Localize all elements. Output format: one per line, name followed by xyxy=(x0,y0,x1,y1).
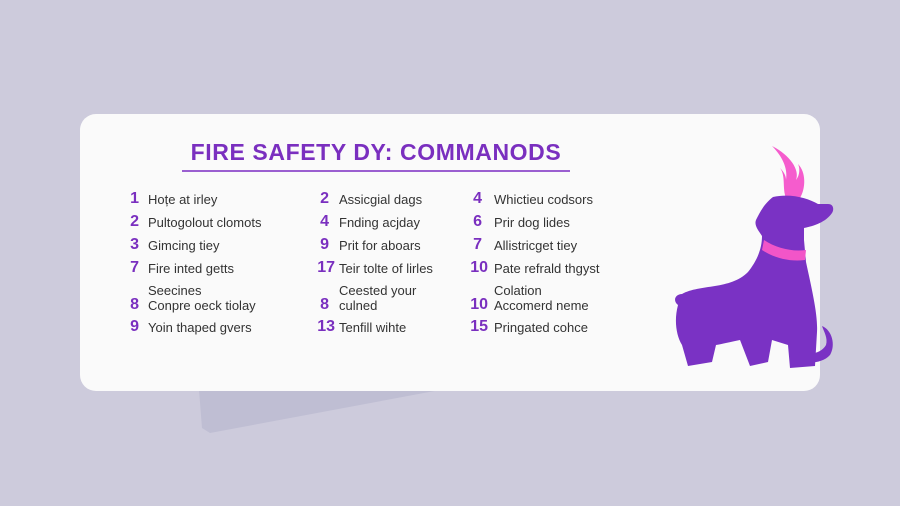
list: commands: Tenfill wihte xyxy=(339,320,406,335)
list: commands: Assicgial dags xyxy=(339,192,422,207)
list: commands: 4 xyxy=(320,213,329,230)
list: commands: 8 xyxy=(320,296,329,313)
flame xyxy=(772,146,804,198)
list: commands: Fire inted getts xyxy=(148,261,234,276)
list: commands: 10 xyxy=(470,259,488,276)
list: commands xyxy=(130,190,600,335)
icon: dog with flame xyxy=(675,146,834,368)
list: commands: Ceested your xyxy=(339,283,416,298)
list: commands: 9 xyxy=(320,236,329,253)
list: commands: 4 xyxy=(473,190,482,207)
list: commands: Colation xyxy=(494,283,542,298)
list: commands: 1 xyxy=(130,190,139,207)
list: commands: 7 xyxy=(473,236,482,253)
list: commands: 2 xyxy=(130,213,139,230)
list: commands: Gimcing tiey xyxy=(148,238,220,253)
list: commands: Teir tolte of lirles xyxy=(339,261,433,276)
collar xyxy=(762,240,806,261)
list: commands: Hoțe at irley xyxy=(148,192,217,207)
list: commands: 7 xyxy=(130,259,139,276)
list: commands: Accomerd neme xyxy=(494,298,589,313)
list: commands: 10 xyxy=(470,296,488,313)
list: commands: 9 xyxy=(130,318,139,335)
title: FIRE SAFETY DY: COMMANODS xyxy=(191,139,561,165)
panel: card xyxy=(80,114,820,391)
list: commands: Prit for aboars xyxy=(339,238,421,253)
list: commands: 2 xyxy=(320,190,329,207)
dog body xyxy=(675,196,833,368)
list: commands: 13 xyxy=(317,318,335,335)
list: commands: culned xyxy=(339,298,377,313)
list: commands: 6 xyxy=(473,213,482,230)
list: commands: 17 xyxy=(317,259,335,276)
list: commands: Pultogolout clomots xyxy=(148,215,261,230)
list: commands: Yoin thaped gvers xyxy=(148,320,252,335)
list: commands: Seecines xyxy=(148,283,201,298)
list: commands: 3 xyxy=(130,236,139,253)
list: commands: Pate refrald thgyst xyxy=(494,261,600,276)
list: commands: Whictieu codsors xyxy=(494,192,593,207)
list: commands: 15 xyxy=(470,318,488,335)
list: commands: Allistricget tiey xyxy=(494,238,577,253)
list: commands: Conpre oeck tiolay xyxy=(148,298,256,313)
list: commands: Prir dog lides xyxy=(494,215,570,230)
list: commands: Pringated cohce xyxy=(494,320,588,335)
list: commands: Fnding acjday xyxy=(339,215,420,230)
list: commands: 8 xyxy=(130,296,139,313)
